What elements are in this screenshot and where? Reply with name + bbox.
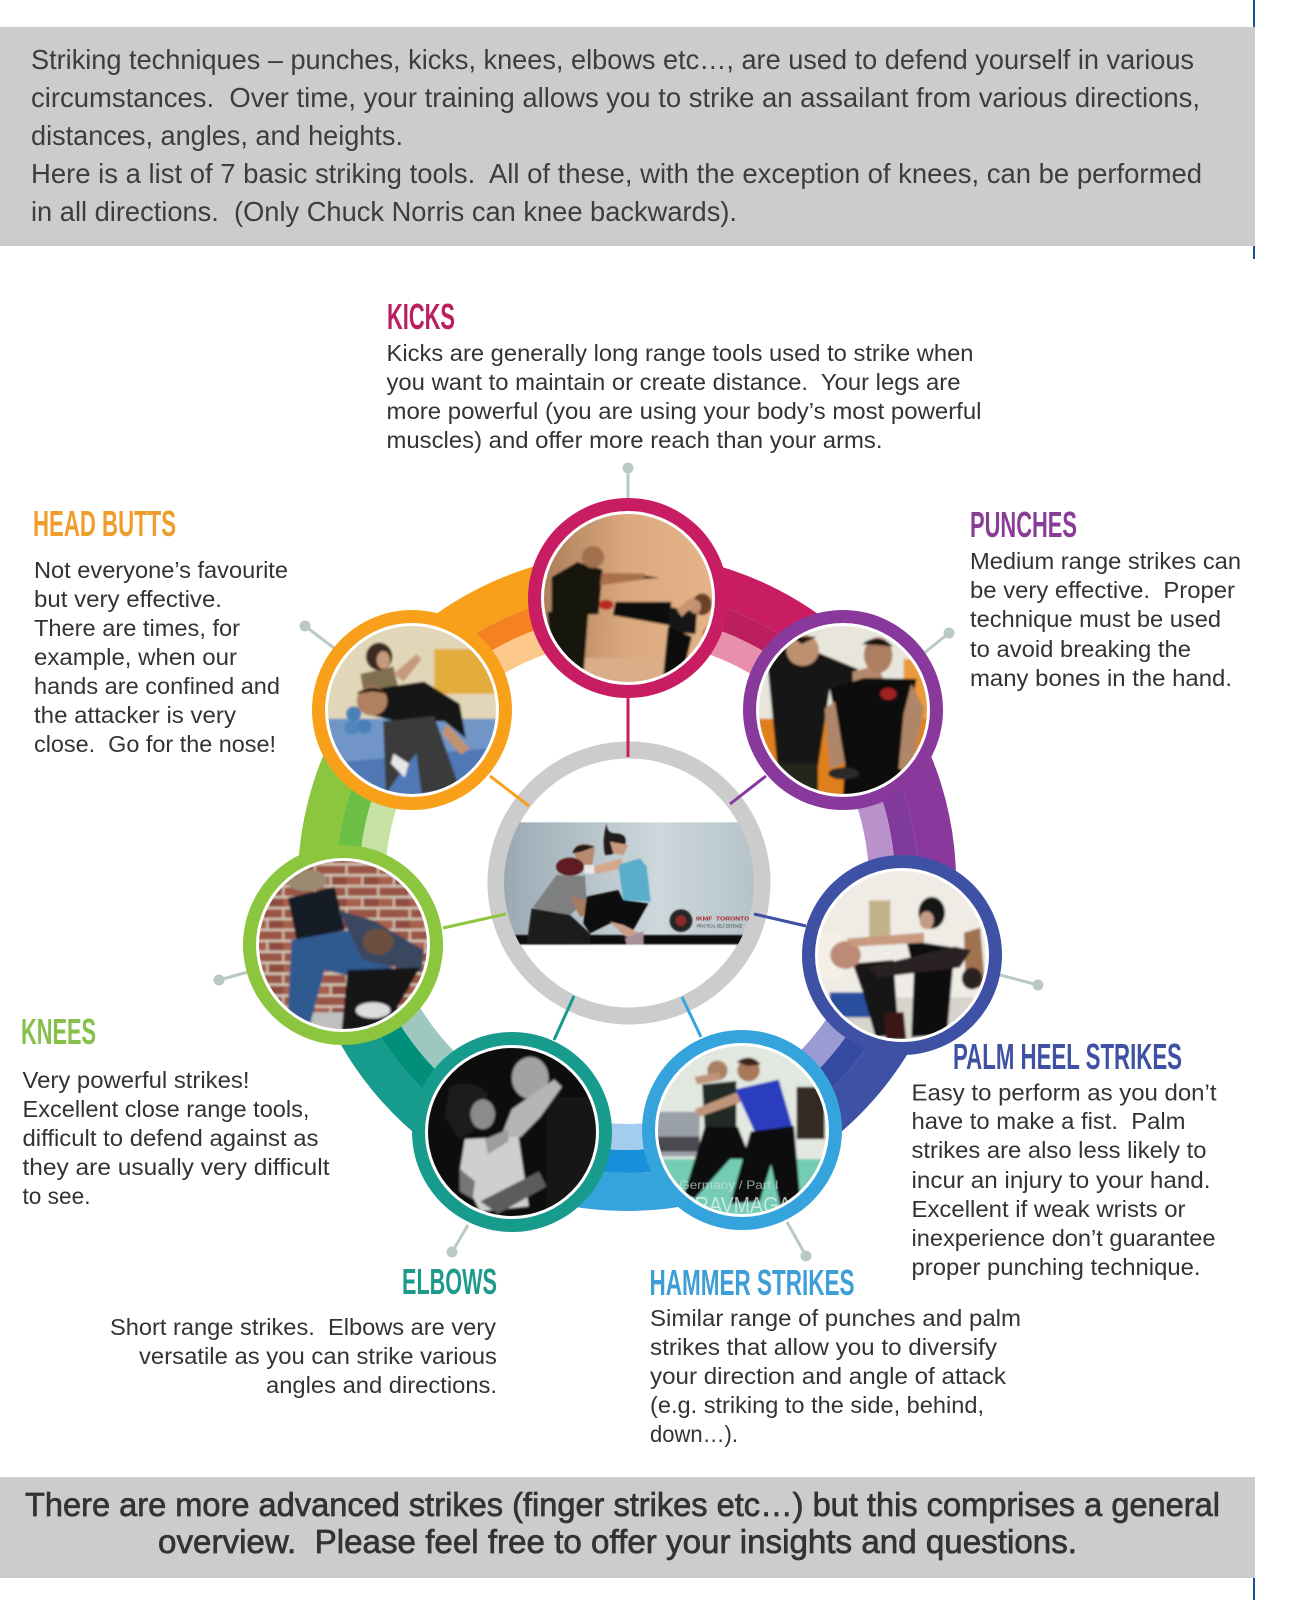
intro text: in all directions. (Only Chuck Norris can knee backwards). (31, 196, 737, 227)
photo circle: hammer strikes: KRAVMAGA (682, 1193, 792, 1217)
text: elbows (110, 1314, 497, 1398)
central photo: PRACTICAL SELF DEFENCE (697, 923, 742, 928)
photo circle: palm heel strikes (802, 855, 1002, 1055)
intro panel (0, 27, 1255, 246)
ring segment: elbows teal (216, 471, 1038, 1293)
photo circle: hammer strikes (642, 1030, 842, 1230)
text: kicks: you want to maintain or create distance. Your legs are (386, 369, 960, 395)
connector lines from centre to circles (443, 698, 806, 1040)
text: punches: to avoid breaking the (970, 636, 1191, 662)
closing panel (0, 1477, 1255, 1578)
heading: elbows: ELBOWS (402, 1261, 497, 1302)
text: knees: difficult to defend against as (22, 1125, 318, 1151)
text: knees: Very powerful strikes! (22, 1067, 250, 1093)
photo circle: elbows (412, 1032, 612, 1232)
text: palm heel strikes: strikes are also less likely to (912, 1137, 1206, 1163)
text: palm heel strikes: inexperience don’t guarantee (912, 1225, 1216, 1251)
text: hammer strikes: Similar range of punches and palm (650, 1305, 1021, 1331)
heading: head butts: HEAD BUTTS (33, 503, 176, 544)
heading: punches: PUNCHES (970, 504, 1077, 545)
text: head butts (34, 557, 288, 757)
intro text: Here is a list of 7 basic striking tools. All of these, with the exception of knees, can be performed (31, 158, 1202, 189)
text: knees: they are usually very difficult (22, 1154, 330, 1180)
closing text: overview. Please feel free to offer your insights and questions. (158, 1523, 1077, 1560)
text: knees: Excellent close range tools, (22, 1096, 310, 1122)
closing text (25, 1486, 1220, 1560)
closing text: There are more advanced strikes (finger strikes etc…) but this comprises a general (25, 1486, 1220, 1523)
intro text: distances, angles, and heights. (31, 120, 403, 151)
text: palm heel strikes: have to make a fist. Palm (912, 1108, 1186, 1134)
intro text (31, 44, 1202, 227)
text: kicks: more powerful (you are using your body’s most powerful (386, 398, 982, 424)
text: punches: many bones in the hand. (970, 665, 1232, 691)
block: kicks (386, 296, 982, 453)
ring segment: kicks crimson (317, 572, 937, 1192)
text: hammer strikes: strikes that allow you to diversify (650, 1334, 998, 1360)
text: elbows: Short range strikes. Elbows are very (110, 1314, 497, 1340)
grey pins around the ring (214, 462, 1044, 1262)
heading: hammer strikes: HAMMER STRIKES (650, 1262, 854, 1303)
page edge line: below intro (1253, 246, 1255, 259)
photo circle: hammer strikes: Germany / Part I (679, 1178, 779, 1192)
block: punches (970, 504, 1241, 691)
ring segment: palm indigo (248, 503, 1006, 1261)
ring segment: punches purple (191, 446, 1063, 1318)
text: hammer strikes: your direction and angle of attack (650, 1363, 1007, 1389)
intro text: circumstances. Over time, your training allows you to strike an assailant from various directions, (31, 82, 1200, 113)
block: palm heel strikes (912, 1036, 1217, 1280)
text: head butts: hands are confined and (34, 673, 280, 699)
photo circle: kicks (528, 498, 728, 698)
text: kicks (386, 340, 982, 453)
photo circle: head butts (312, 610, 512, 810)
text: head butts: example, when our (34, 644, 237, 670)
text: head butts: There are times, for (34, 615, 240, 641)
block: elbows (110, 1261, 497, 1398)
page edge line: top (1253, 0, 1255, 27)
text: head butts: but very effective. (34, 586, 222, 612)
block: head butts (33, 503, 288, 757)
block: knees (21, 1011, 330, 1209)
text: hammer strikes: (e.g. striking to the side, behind, (650, 1392, 984, 1418)
text: punches: Medium range strikes can (970, 548, 1241, 574)
text: palm heel strikes: Excellent if weak wrists or (912, 1196, 1186, 1222)
text: head butts: close. Go for the nose! (34, 731, 276, 757)
ring segment: knees green (257, 512, 997, 1252)
tri-band colour ring (191, 446, 1063, 1318)
text: punches (970, 548, 1241, 691)
text: head butts: the attacker is very (34, 702, 237, 728)
text: knees: to see. (22, 1183, 90, 1209)
text: knees (22, 1067, 330, 1209)
text: head butts: Not everyone’s favourite (34, 557, 288, 583)
text: palm heel strikes: incur an injury to your hand. (912, 1167, 1210, 1193)
text: punches: be very effective. Proper (970, 577, 1235, 603)
page edge line: bottom (1253, 1578, 1255, 1600)
text: kicks: Kicks are generally long range tools used to strike when (386, 340, 974, 366)
heading: kicks: KICKS (387, 296, 455, 337)
central photo (500, 822, 760, 944)
text: palm heel strikes (912, 1080, 1217, 1280)
text: hammer strikes: down…). (650, 1421, 738, 1447)
intro text: Striking techniques – punches, kicks, knees, elbows etc…, are used to defend yourself in various (31, 44, 1194, 75)
text: kicks: muscles) and offer more reach than your arms. (386, 427, 882, 453)
text: elbows: angles and directions. (266, 1372, 497, 1398)
text: hammer strikes (650, 1305, 1021, 1447)
block: hammer strikes (650, 1262, 1021, 1447)
text: palm heel strikes: proper punching technique. (912, 1254, 1200, 1280)
photo circle: knees (243, 845, 443, 1045)
text: palm heel strikes: Easy to perform as you don’t (912, 1080, 1217, 1106)
heading: knees: KNEES (21, 1011, 96, 1052)
text: punches: technique must be used (970, 606, 1221, 632)
ring segment: hammer blue (215, 470, 1039, 1294)
central image circle (496, 750, 762, 1016)
ring segment: head butts orange (191, 446, 1063, 1318)
central photo: IKMF TORONTO (696, 916, 750, 922)
photo circle: punches (743, 610, 943, 810)
text: elbows: versatile as you can strike various (139, 1343, 497, 1369)
